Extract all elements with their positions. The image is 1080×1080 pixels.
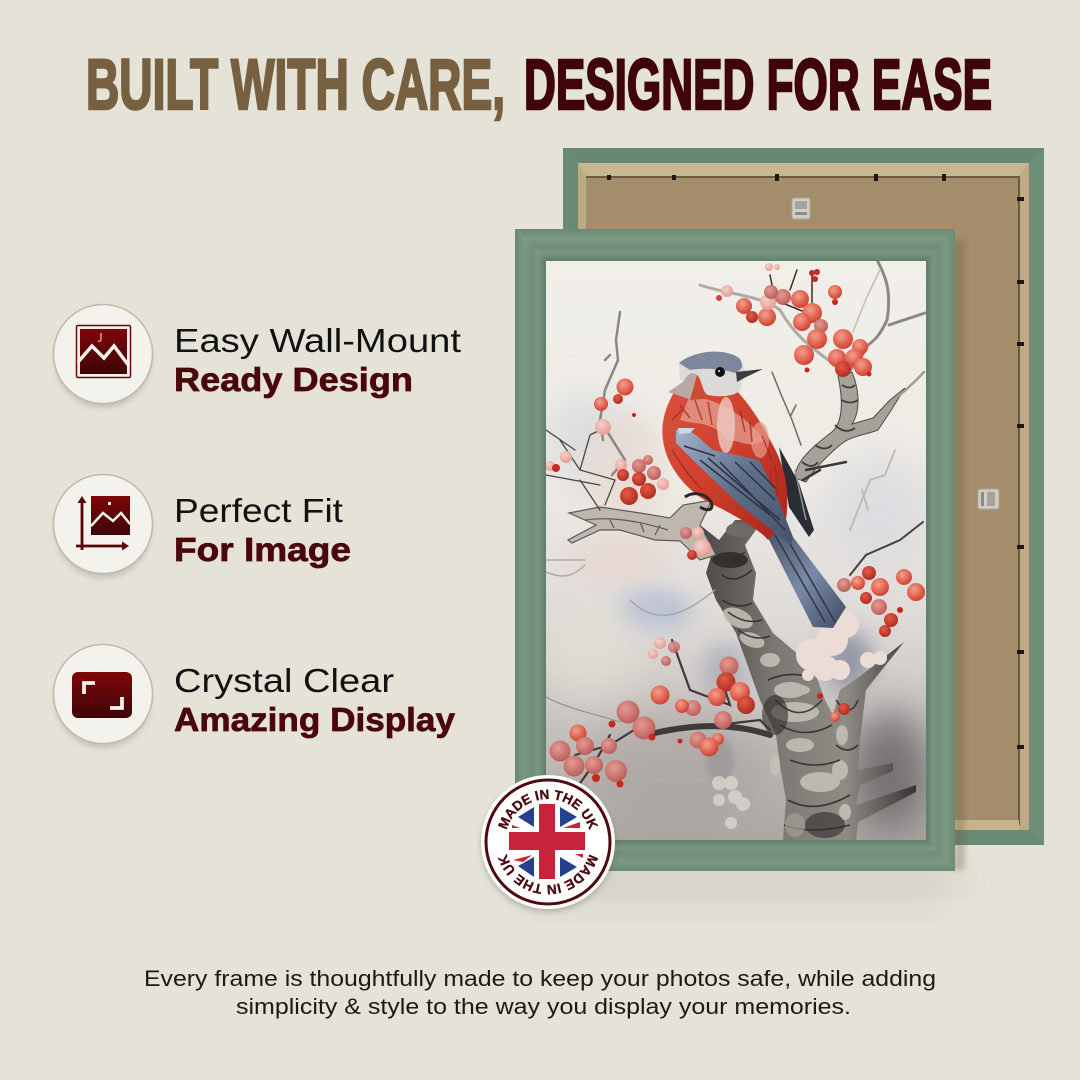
label: ready design: Ready Design <box>174 362 413 399</box>
badge ring text: MADE IN THE UK <box>498 789 598 830</box>
badge ring text: MADE IN THE UK <box>498 854 598 895</box>
backing board <box>586 176 1019 825</box>
badge: made in the uk <box>478 775 616 914</box>
bird <box>662 352 846 628</box>
feature: perfect fit <box>54 474 351 578</box>
feature: easy wall-mount <box>54 304 462 408</box>
wing <box>676 429 793 545</box>
icon: side hanger <box>978 489 999 509</box>
berries: top cluster <box>716 263 872 377</box>
perch branch <box>568 500 716 560</box>
berries: lower cluster <box>550 637 850 788</box>
label: perfect fit: Perfect Fit <box>174 493 344 530</box>
feet <box>685 494 712 510</box>
title: BUILT WITH CARE, <box>86 46 505 125</box>
trunk <box>680 520 916 840</box>
feature: crystal clear <box>54 644 455 748</box>
upper branch <box>795 372 905 482</box>
blossoms <box>796 612 887 681</box>
icon: union flag <box>509 804 585 879</box>
watercolour washes <box>540 395 935 830</box>
back of frame <box>560 148 1044 886</box>
red body <box>662 392 788 540</box>
badge ring text <box>498 789 598 895</box>
label: easy wall-mount: Easy Wall-Mount <box>174 323 462 360</box>
label: amazing display: Amazing Display <box>174 702 455 739</box>
icon: wall-mount picture <box>54 304 152 408</box>
tail feathers <box>768 532 846 628</box>
footer text <box>144 966 936 1019</box>
footer text: Every frame is thoughtfully made to keep your photos safe, while adding <box>144 966 936 991</box>
footer text: simplicity & style to the way you display your memories. <box>236 994 851 1019</box>
pale bokeh <box>712 776 750 829</box>
front frame <box>515 229 965 904</box>
twigs <box>546 260 925 790</box>
label: for image: For Image <box>174 532 351 569</box>
berries: left cluster <box>545 378 711 560</box>
berries: right cluster <box>837 566 925 637</box>
icon: perfect fit image <box>54 474 152 578</box>
painting: bird on blossom branch <box>540 260 935 840</box>
label: crystal clear: Crystal Clear <box>174 663 394 700</box>
icon: crystal clear display <box>54 644 152 748</box>
icon: top hanger <box>792 198 810 219</box>
head <box>679 363 746 396</box>
